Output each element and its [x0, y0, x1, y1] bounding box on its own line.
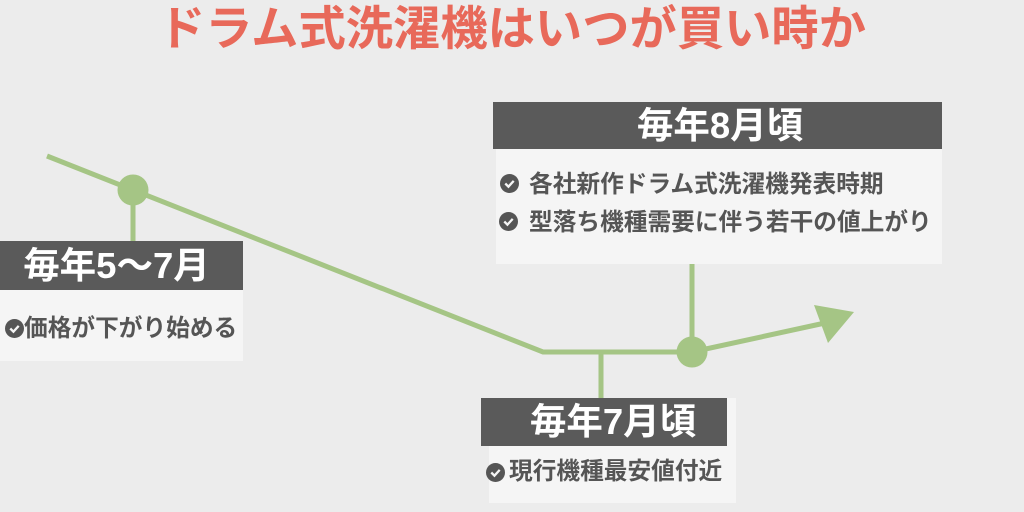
- icon: check: [5, 319, 24, 338]
- marker: August: [676, 336, 708, 368]
- heading: May to July: [0, 241, 243, 290]
- heading: August: 毎年8月頃: [637, 105, 803, 146]
- trend line: [47, 156, 825, 398]
- item text: 現行機種最安値付近: [509, 459, 722, 485]
- panel: August: [493, 102, 942, 264]
- heading: July: [481, 398, 727, 446]
- marker: May to July: [118, 174, 148, 206]
- heading: July: 毎年7月頃: [530, 401, 696, 442]
- heading: August: [493, 102, 942, 149]
- panel: July: [481, 398, 736, 503]
- title: ドラム式洗濯機はいつが買い時か: [158, 3, 866, 56]
- icon: check: [486, 463, 505, 482]
- icon: check 2: [499, 212, 518, 231]
- arrow head: [814, 305, 854, 343]
- item text 2: 型落ち機種需要に伴う若干の値上がり: [529, 210, 932, 236]
- panel: May to July: [0, 241, 243, 361]
- text block: August: [496, 149, 942, 264]
- text block: May to July: [0, 290, 243, 361]
- icon: check 1: [500, 174, 519, 193]
- item text: 価格が下がり始める: [24, 316, 237, 342]
- item text 1: 各社新作ドラム式洗濯機発表時期: [529, 172, 884, 198]
- heading: May to July: 毎年5〜7月: [23, 245, 210, 286]
- text block: July: [489, 398, 736, 503]
